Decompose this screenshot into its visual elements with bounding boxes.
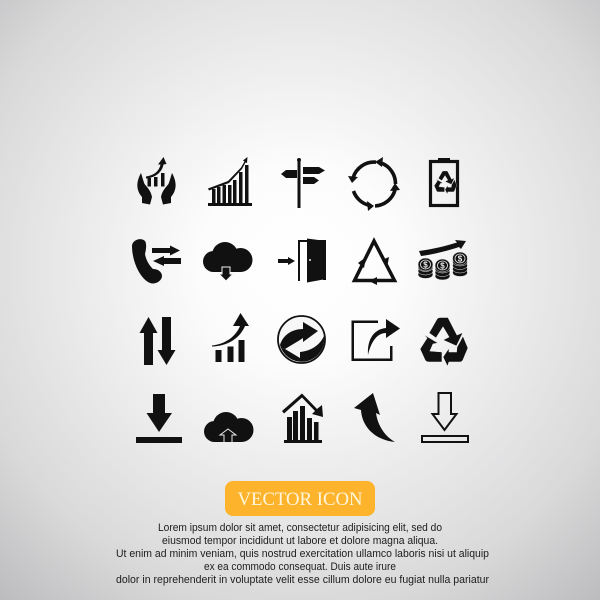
text block: lorem ipsum: ex ea commodo consequat. Duis aute irure [204, 561, 396, 573]
icon: share arrow out of box [352, 319, 400, 361]
text block: lorem ipsum [116, 522, 489, 586]
button: vector icon [225, 481, 375, 516]
icon: battery with recycle symbol [430, 158, 458, 206]
icon: up and down arrows [140, 317, 176, 365]
text block: lorem ipsum: eiusmod tempor incididunt ut labore et dolore magna aliqua. [162, 535, 438, 547]
icon: outlined download arrow [422, 393, 468, 442]
icon: coin stacks with arrow: $ [440, 262, 445, 270]
icon: coin stacks with arrow: $ [423, 260, 428, 270]
icon: growth bars with curved arrow [212, 313, 249, 362]
text block: lorem ipsum: Lorem ipsum dolor sit amet, consectetur adipisicing elit, sed do [158, 522, 442, 534]
icon: download arrow onto bar [136, 394, 182, 443]
text block: lorem ipsum: dolor in reprehenderit in voluptate velit esse cillum dolore eu fugiat nulla pariatur [116, 574, 489, 586]
icon: recycle symbol [420, 318, 468, 366]
icon: bar chart with rising line [208, 157, 252, 206]
icon: coin stacks with arrow [418, 240, 468, 280]
icon: bar chart with falling arrow [282, 394, 323, 443]
icon: coin stacks with arrow: $ [458, 254, 463, 264]
text block: lorem ipsum: Ut enim ad minim veniam, quis nostrud exercitation ullamco laboris nisi ut aliquip [116, 548, 489, 560]
button: vector icon: VECTOR ICON [238, 489, 363, 510]
icon: cloud download [203, 242, 252, 281]
icon: telephone with arrows [132, 239, 181, 284]
icon: circular arrows [348, 157, 400, 211]
icon: triangle of arrows [354, 241, 394, 285]
icon: circular arrow badge [278, 316, 325, 363]
icon: signpost [281, 158, 325, 208]
icon: cloud upload [204, 412, 254, 442]
icon: hands holding growth chart [137, 157, 176, 204]
icon: door with entry arrow [278, 238, 326, 282]
icon: curved arrow pointing up-left [354, 393, 395, 442]
